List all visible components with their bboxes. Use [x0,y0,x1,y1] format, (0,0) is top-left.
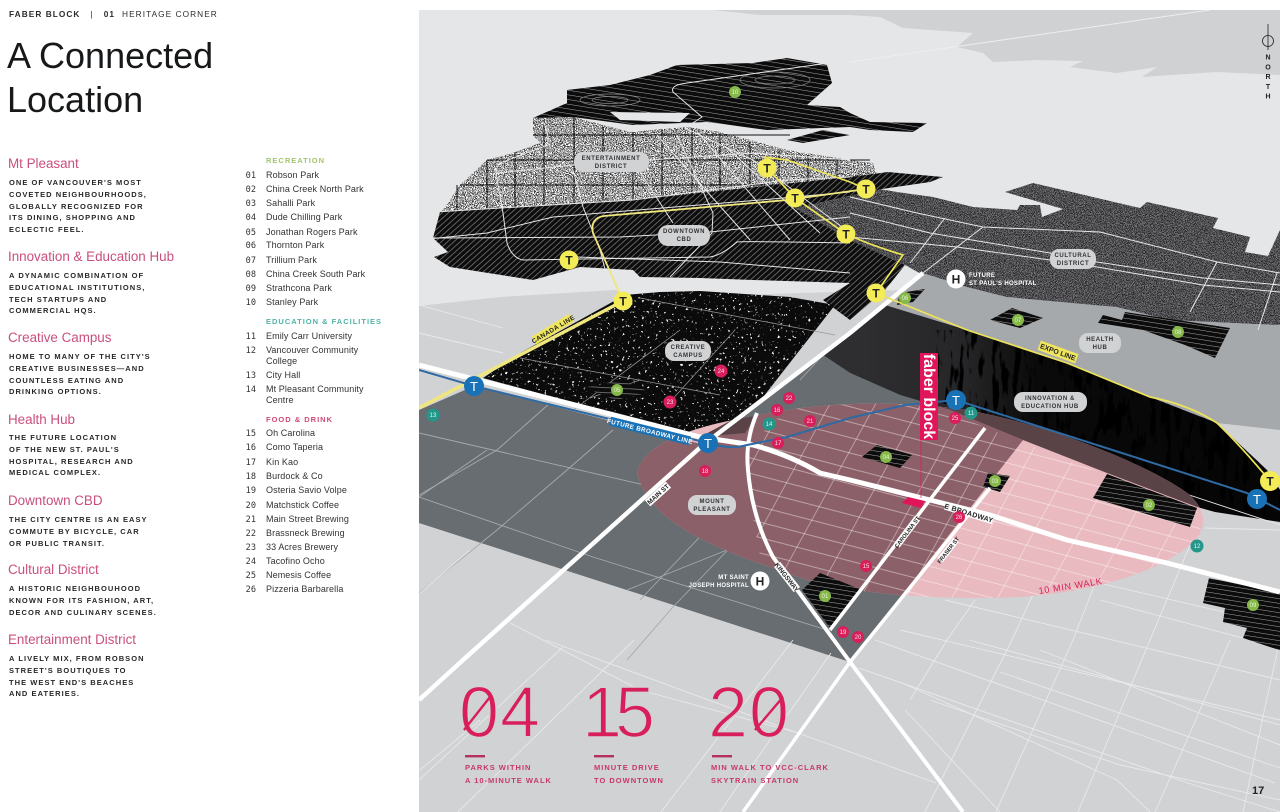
pill: downtown cbd: DOWNTOWN [663,229,705,235]
legend list: food and drink: 24 [246,557,256,567]
text: downtown cbd [9,515,148,548]
text: innovation and education hub: A DYNAMIC COMBINATION OF [9,271,144,280]
pill: health hub [1079,333,1121,353]
stat: 15 minute drive: 15 [582,673,653,753]
text: entertainment district: THE WEST END'S BEACHES [9,678,134,687]
marker 02: 02 [1146,503,1153,509]
station yellow 4 [836,224,856,244]
north compass: O [1265,64,1271,72]
marker 26 [953,511,965,523]
legend list: recreation: Sahalli Park [266,198,315,208]
faber block pointer line [920,440,922,498]
legend list: food and drink: 33 Acres Brewery [266,542,338,552]
legend list: food and drink: 21 [246,515,256,525]
text: downtown cbd: COMMUTE BY BICYCLE, CAR [9,527,140,536]
marker 20: 20 [855,635,862,641]
legend list: food and drink: Nemesis Coffee [266,570,331,580]
station yellow 8 [1260,471,1280,491]
text: creative campus: COUNTLESS EATING AND [9,376,124,385]
legend list: recreation: China Creek South Park [266,269,365,279]
slate street network [419,355,850,660]
title: A Connected [7,35,213,76]
station yellow 2 [786,188,804,208]
stat: 20 min walk: 20 [708,673,790,753]
pill: innovation and education hub: INNOVATION & [1025,396,1075,402]
marker 02 [1143,499,1155,511]
creative campus streets [520,298,835,420]
marker 17 [772,437,784,449]
station blue 4: T [1253,492,1261,507]
pill: entertainment district [574,152,649,172]
marker 20 [852,631,864,643]
label: future broadway line: FUTURE BROADWAY LINE [606,418,693,446]
legend list: recreation: Stanley Park [266,297,318,307]
text: downtown cbd: OR PUBLIC TRANSIT. [9,539,105,548]
station blue 1 [464,376,484,396]
pill: creative campus: CAMPUS [673,353,703,359]
faber block sign: faber block [920,354,937,439]
stat: 04 parks: 04 [459,673,541,753]
legend list: food and drink: Como Taperia [266,442,323,452]
text: creative campus: DRINKING OPTIONS. [9,387,102,396]
marker 05 [611,384,623,396]
marker 08: 08 [1175,330,1182,336]
legend list: education and facilities: City Hall [266,370,300,380]
major roads [419,273,1280,812]
innovation hub black band [823,305,1280,522]
station blue 4 [1247,489,1267,509]
pill: cultural district: CULTURAL [1054,253,1092,259]
legend list: recreation [246,170,366,308]
park 03 [983,473,1010,492]
legend list: education and facilities [246,331,364,405]
text: mt pleasant: ECLECTIC FEEL. [9,225,85,234]
land: south city [419,290,1280,812]
pill: cultural district: DISTRICT [1057,261,1089,267]
marker 19 [837,626,849,638]
marker 18: 18 [702,469,709,475]
marker 12 [1190,540,1204,552]
legend heading: recreation: RECREATION [266,156,325,165]
land: north shore [713,10,1280,77]
pill: innovation and education hub [1014,392,1087,412]
hospital label: st paul's [946,270,1037,288]
text: health hub: OF THE NEW ST. PAUL'S [9,445,120,454]
marker 25 [949,412,961,424]
blue line stations [464,376,1267,509]
legend list: food and drink: Burdock & Co [266,471,323,481]
legend list: recreation: Jonathan Rogers Park [266,227,358,237]
station blue 3: T [952,393,960,408]
legend list: recreation: China Creek North Park [266,184,364,194]
water background [419,10,1280,306]
legend list: food and drink: 16 [246,443,256,453]
hospital label: st paul's: ST PAUL'S HOSPITAL [969,281,1037,287]
stat: 04 parks: A 10-MINUTE WALK [465,776,552,785]
pill: innovation and education hub: EDUCATION HUB [1021,404,1079,410]
road label: e broadway: E BROADWAY [943,503,994,525]
pill: downtown cbd [658,225,710,246]
text: creative campus: HOME TO MANY OF THE CITY'S [9,352,151,361]
marker 01 [819,590,831,602]
10 minute walk zone [637,404,1204,598]
marker 19: 19 [840,630,847,636]
legend list: food and drink: 17 [246,458,256,468]
district: health hub [885,273,1280,430]
legend list: food and drink: Matchstick Coffee [266,500,339,510]
station blue 1: T [470,379,478,394]
legend list: food and drink: Osteria Savio Volpe [266,485,347,495]
north compass: T [1266,84,1271,91]
marker 24 [714,364,728,378]
marker 15 [860,560,872,572]
legend list: food and drink: 25 [246,571,256,581]
pill: mount pleasant: MOUNT [700,499,724,505]
marker 03 [989,475,1001,487]
hospital label: mt saint joseph: MT SAINT [718,575,749,581]
park 05 contours [585,380,650,400]
text: innovation and education hub: EDUCATIONAL INSTITUTIONS, [9,283,145,292]
station yellow 7 [866,284,886,302]
yellow skytrain stations [560,158,1280,491]
stat: 20 min walk: MIN WALK TO VCC-CLARK [711,763,829,772]
title [7,35,213,120]
marker 06: 06 [902,296,909,302]
text: cultural district: A HISTORIC NEIGHBOUHOOD [9,584,141,593]
station yellow 8: T [1266,474,1274,488]
marker 04: 04 [883,455,890,461]
pill: entertainment district: DISTRICT [595,164,627,170]
marker 16: 16 [774,408,781,414]
road label: fraser st: FRASER ST [937,536,961,565]
marker 21: 21 [807,419,814,425]
map panel [419,10,1280,812]
marker 22: 22 [786,396,793,402]
light land lines [419,305,1280,812]
teal facility markers [426,406,1204,552]
legend list: education and facilities: Mt Pleasant Community [266,384,364,394]
legend list: recreation: 01 [246,171,256,181]
park: stanley park [533,58,927,143]
stat: 04 parks [459,673,552,785]
heading: downtown cbd: Downtown CBD [8,493,103,508]
legend list: food and drink: 22 [246,529,256,539]
text: mt pleasant: COVETED NEIGHBOURHOODS, [9,190,147,199]
pill: cultural district [1050,249,1096,269]
marker 18 [699,465,711,477]
label: 10 min walk: 10 MIN WALK [1038,576,1103,596]
marker 05: 05 [614,388,621,394]
station yellow 3 [856,180,876,198]
pill: creative campus: CREATIVE [671,345,705,351]
legend list: education and facilities: Centre [266,395,294,405]
legend list: education and facilities: 12 [246,346,256,356]
marker 13: 13 [430,413,437,419]
marker 12: 12 [1194,544,1201,550]
page number: 17 [1252,785,1264,797]
station yellow 4: T [842,228,850,242]
heading: cultural district: Cultural District [8,562,99,577]
stat: 15 minute drive: MINUTE DRIVE [594,763,660,772]
legend list: food and drink: Kin Kao [266,457,298,467]
innovation hub ink streaks [936,330,1280,490]
label: canada line: CANADA LINE [531,314,577,345]
hospital label: mt saint joseph: JOSEPH HOSPITAL [689,583,749,589]
station yellow 2: T [791,192,799,206]
legend list: recreation: 06 [246,241,256,251]
text: entertainment district: AND EATERIES. [9,689,80,698]
green park markers [611,86,1259,611]
park 08 [1098,312,1230,358]
legend list: food and drink: Oh Carolina [266,428,315,438]
station blue 2: T [704,436,712,451]
marker 04 [880,451,892,463]
station yellow 5: T [565,254,573,268]
district: entertainment [440,117,877,214]
text: cultural district: DECOR AND CULINARY SCENES. [9,608,157,617]
pink food and drink markers [664,364,965,643]
hospital label: st paul's: FUTURE [969,273,995,279]
marker 11: 11 [968,411,975,417]
legend list: recreation: Dude Chilling Park [266,212,342,222]
text: creative campus [9,352,151,396]
marker 01: 01 [822,594,829,600]
station yellow 5 [560,250,578,270]
north compass: H [1265,94,1271,100]
text: health hub: HOSPITAL, RESEARCH AND [9,457,134,466]
header line: FABER BLOCK | 01 HERITAGE CORNER [9,9,218,19]
downtown street network [419,60,1280,330]
stat: 04 parks: PARKS WITHIN [465,763,531,772]
marker 14 [762,418,776,430]
marker 09: 09 [1250,603,1257,609]
text: cultural district: KNOWN FOR ITS FASHION, ART, [9,596,154,605]
legend list: recreation: Thornton Park [266,240,324,250]
text: entertainment district: STREET'S BOUTIQUES TO [9,666,126,675]
station yellow 1 [758,158,776,178]
text: mt pleasant [9,178,147,234]
marker 23 [664,396,676,408]
park 09 [1203,578,1280,650]
station yellow 1: T [763,162,771,176]
hospital label: mt saint joseph [689,572,770,590]
text: cultural district [9,584,157,617]
stat: 20 min walk [708,673,829,785]
marker 24: 24 [718,369,725,375]
marker 16 [771,404,783,416]
stat: 15 minute drive [582,673,664,785]
marker 17: 17 [775,441,782,447]
faber block site lot [902,497,925,508]
park 01 [802,573,862,628]
station yellow 3: T [862,182,870,196]
station yellow 6: T [619,294,627,308]
legend list: food and drink: 23 [246,543,256,553]
legend list: food and drink: Main Street Brewing [266,514,349,524]
text: entertainment district: A LIVELY MIX, FROM ROBSON [9,654,145,663]
legend list: food and drink: 26 [246,585,256,595]
park 04 [862,445,912,468]
heading: innovation and education hub: Innovation & Education Hub [8,249,174,264]
marker 11 [964,406,978,420]
marker 03: 03 [992,479,999,485]
legend list: education and facilities: College [266,356,297,366]
marker 21 [804,415,816,427]
label: expo line: EXPO LINE [1039,343,1077,363]
legend list: recreation: 10 [246,298,256,308]
legend list: recreation: Trillium Park [266,255,317,265]
marker 10 [729,86,741,98]
legend list: food and drink: 20 [246,501,256,511]
pill: entertainment district: ENTERTAINMENT [582,156,640,162]
hospital label: st paul's: H [952,272,960,286]
text: health hub: THE FUTURE LOCATION [9,433,117,442]
text: downtown cbd: THE CITY CENTRE IS AN EASY [9,515,148,524]
heading: entertainment district: Entertainment District [8,632,136,647]
legend list: food and drink: 18 [246,472,256,482]
legend list: education and facilities: Emily Carr University [266,331,352,341]
park 07 [990,308,1043,328]
expo line [763,157,1270,481]
legend list: education and facilities: 11 [246,332,256,342]
district: cultural [795,183,1280,330]
park 06 [897,289,925,305]
district: slate mount pleasant land [419,356,920,661]
text: innovation and education hub: COMMERCIAL HQS. [9,306,97,315]
legend list: food and drink: 15 [246,429,256,439]
marker 13 [426,408,440,422]
text: innovation and education hub [9,271,145,315]
road: bridge north [850,10,1210,62]
legend list: recreation: 08 [246,270,256,280]
legend list: recreation: 04 [246,213,256,223]
district: downtown hatched [433,172,943,320]
pill: downtown cbd: CBD [677,237,691,243]
text: entertainment district [9,654,145,698]
text: innovation and education hub: TECH STARTUPS AND [9,295,107,304]
pill: mount pleasant: PLEASANT [693,507,731,513]
heading: mt pleasant: Mt Pleasant [8,156,79,171]
north compass: N [1265,54,1271,62]
text: health hub [9,433,134,477]
station blue 3 [946,390,966,410]
marker 22 [783,392,795,404]
legend heading: education and facilities: EDUCATION & FACILITIES [266,317,382,326]
text: mt pleasant: GLOBALLY RECOGNIZED FOR [9,202,144,211]
title: Location [7,79,143,120]
text: mt pleasant: ITS DINING, SHOPPING AND [9,213,136,222]
marker 08 [1172,326,1184,338]
road label: kingsway: KINGSWAY [773,562,800,594]
marker 09 [1247,599,1259,611]
legend list: food and drink: Brassneck Brewing [266,528,345,538]
marker 10: 10 [732,90,739,96]
road label: main st: MAIN ST [646,483,671,506]
marker 07: 07 [1015,318,1022,324]
stat: 20 min walk: SKYTRAIN STATION [711,776,799,785]
pill: mount pleasant [688,495,736,515]
heading: health hub: Health Hub [8,412,75,427]
text: health hub: MEDICAL COMPLEX. [9,468,101,477]
pill: health hub: HEALTH [1086,337,1114,343]
pill: creative campus [665,341,711,361]
station blue 2 [698,433,718,453]
legend list: education and facilities: 14 [246,385,256,395]
legend list: education and facilities: 13 [246,371,256,381]
legend list: recreation: 02 [246,185,256,195]
legend list: recreation: 07 [246,256,256,266]
north compass [1262,24,1274,100]
road label: carolina st: CAROLINA ST [894,515,922,550]
marker 26: 26 [956,515,963,521]
marker 06 [899,292,911,304]
legend list: recreation: 05 [246,228,256,238]
legend list: food and drink: 19 [246,486,256,496]
future broadway line [419,370,1280,510]
legend list: food and drink [246,428,349,595]
marker 15: 15 [863,564,870,570]
pill: health hub: HUB [1093,345,1107,351]
north compass: R [1265,74,1271,81]
canada line [419,189,866,408]
legend heading: food and drink: FOOD & DRINK [266,415,333,424]
marker 07 [1012,314,1024,326]
text: mt pleasant: ONE OF VANCOUVER'S MOST [9,178,142,187]
text: creative campus: CREATIVE BUSINESSES—AND [9,364,145,373]
legend list: food and drink: Tacofino Ocho [266,556,325,566]
heading: creative campus: Creative Campus [8,330,111,345]
marker 25: 25 [952,416,959,422]
station yellow 7: T [872,286,880,300]
marker 14: 14 [766,422,773,428]
entertainment grid lines [457,117,870,212]
stat: 15 minute drive: TO DOWNTOWN [594,776,664,785]
hospital label: mt saint joseph: H [756,574,764,588]
legend list: recreation: 09 [246,284,256,294]
legend list: recreation: Robson Park [266,170,319,180]
legend list: recreation: 03 [246,199,256,209]
creative campus block [483,291,835,437]
station yellow 6 [614,292,632,310]
marker 23: 23 [667,400,674,406]
legend list: education and facilities: Vancouver Community [266,345,358,355]
legend list: recreation: Strathcona Park [266,283,332,293]
park 02 [1093,474,1197,527]
legend list: food and drink: Pizzeria Barbarella [266,584,343,594]
